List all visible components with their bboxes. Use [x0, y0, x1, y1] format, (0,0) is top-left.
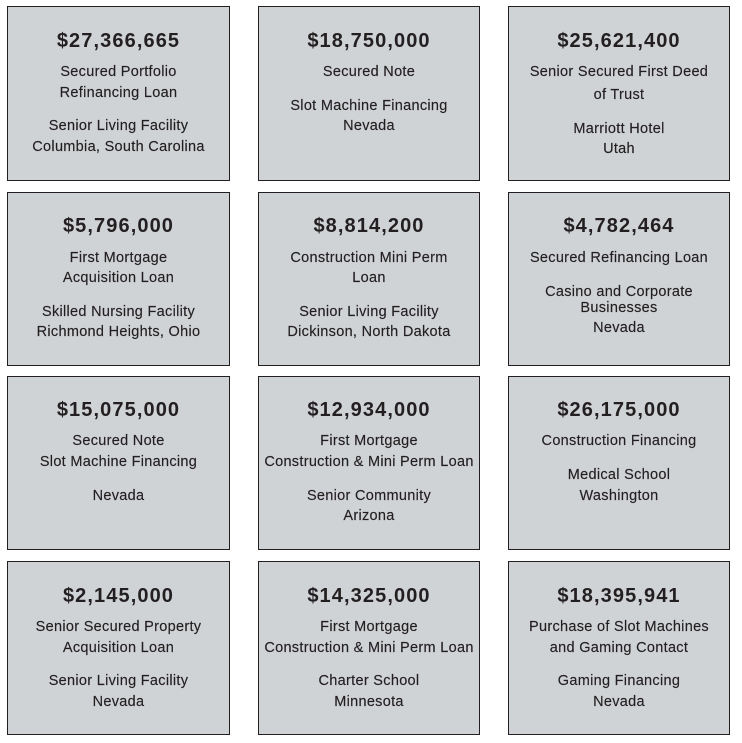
card: $5,796,000: Acquisition Loan	[63, 270, 174, 286]
card: $25,621,400: $25,621,400	[557, 30, 681, 52]
card: $4,782,464: Nevada	[593, 320, 645, 336]
card: $27,366,665: $27,366,665	[57, 30, 180, 52]
card: $2,145,000: $2,145,000	[63, 585, 174, 607]
card: $8,814,200	[258, 192, 480, 366]
card: $14,325,000: $14,325,000	[307, 585, 431, 607]
card: $14,325,000: Minnesota	[334, 694, 404, 710]
card: $5,796,000: Skilled Nursing Facility	[42, 304, 195, 320]
card: $25,621,400	[508, 6, 730, 181]
card: $5,796,000: First Mortgage	[70, 250, 167, 266]
card: $8,814,200: Dickinson, North Dakota	[287, 324, 451, 340]
card: $12,934,000: Construction & Mini Perm Loan	[264, 454, 474, 470]
card: $4,782,464: Secured Refinancing Loan	[530, 250, 708, 266]
card: $2,145,000: Senior Living Facility	[49, 673, 188, 689]
card: $14,325,000: Charter School	[319, 673, 419, 689]
card: $15,075,000: Nevada	[93, 488, 144, 504]
card: $26,175,000: Washington	[579, 488, 659, 504]
card: $26,175,000	[508, 376, 730, 550]
card: $15,075,000: $15,075,000	[57, 399, 180, 421]
card: $12,934,000: Arizona	[343, 508, 395, 524]
card: $25,621,400: Utah	[603, 141, 635, 157]
card: $8,814,200: Loan	[352, 270, 386, 286]
card: $12,934,000	[258, 376, 480, 550]
card: $4,782,464: Casino and Corporate	[545, 284, 693, 300]
card: $4,782,464: Businesses	[580, 300, 658, 316]
card: $5,796,000: Richmond Heights, Ohio	[37, 324, 200, 340]
card: $18,750,000: Slot Machine Financing	[290, 98, 448, 114]
card: $18,750,000: Secured Note	[323, 64, 415, 80]
card: $12,934,000: $12,934,000	[307, 399, 431, 421]
card: $18,395,941	[508, 561, 730, 735]
card: $14,325,000: Construction & Mini Perm Loan	[264, 640, 474, 656]
card: $27,366,665: Secured Portfolio	[60, 64, 177, 80]
card: $2,145,000	[7, 561, 230, 735]
card: $14,325,000	[258, 561, 480, 735]
card: $18,750,000	[258, 6, 480, 181]
card: $25,621,400: Senior Secured First Deed	[530, 64, 708, 80]
card: $12,934,000: Senior Community	[307, 488, 431, 504]
card: $18,750,000: Nevada	[343, 118, 395, 134]
card: $18,395,941: Nevada	[593, 694, 645, 710]
card: $27,366,665: Refinancing Loan	[60, 85, 177, 101]
card: $2,145,000: Acquisition Loan	[63, 640, 174, 656]
card: $18,395,941: Purchase of Slot Machines	[529, 619, 709, 635]
card: $15,075,000	[7, 376, 230, 550]
card: $5,796,000	[7, 192, 230, 366]
card: $4,782,464	[508, 192, 730, 366]
card: $4,782,464: $4,782,464	[563, 215, 675, 237]
card: $25,621,400: Marriott Hotel	[573, 121, 665, 137]
card: $18,395,941: Gaming Financing	[558, 673, 680, 689]
card: $8,814,200: $8,814,200	[313, 215, 425, 237]
card: $15,075,000: Slot Machine Financing	[40, 454, 197, 470]
card: $5,796,000: $5,796,000	[63, 215, 174, 237]
card: $26,175,000: Construction Financing	[542, 433, 696, 449]
card: $18,395,941: and Gaming Contact	[550, 640, 688, 656]
card: $26,175,000: $26,175,000	[557, 399, 681, 421]
card: $18,395,941: $18,395,941	[557, 585, 681, 607]
card: $2,145,000: Senior Secured Property	[36, 619, 201, 635]
card: $2,145,000: Nevada	[93, 694, 144, 710]
card: $8,814,200: Senior Living Facility	[299, 304, 439, 320]
card: $15,075,000: Secured Note	[72, 433, 165, 449]
card: $27,366,665	[7, 6, 230, 181]
card: $12,934,000: First Mortgage	[320, 433, 418, 449]
card: $18,750,000: $18,750,000	[307, 30, 431, 52]
card: $27,366,665: Columbia, South Carolina	[32, 139, 205, 155]
card: $27,366,665: Senior Living Facility	[49, 118, 188, 134]
card: $26,175,000: Medical School	[568, 467, 670, 483]
card: $14,325,000: First Mortgage	[320, 619, 418, 635]
card: $25,621,400: of Trust	[594, 87, 644, 103]
card: $8,814,200: Construction Mini Perm	[290, 250, 448, 266]
